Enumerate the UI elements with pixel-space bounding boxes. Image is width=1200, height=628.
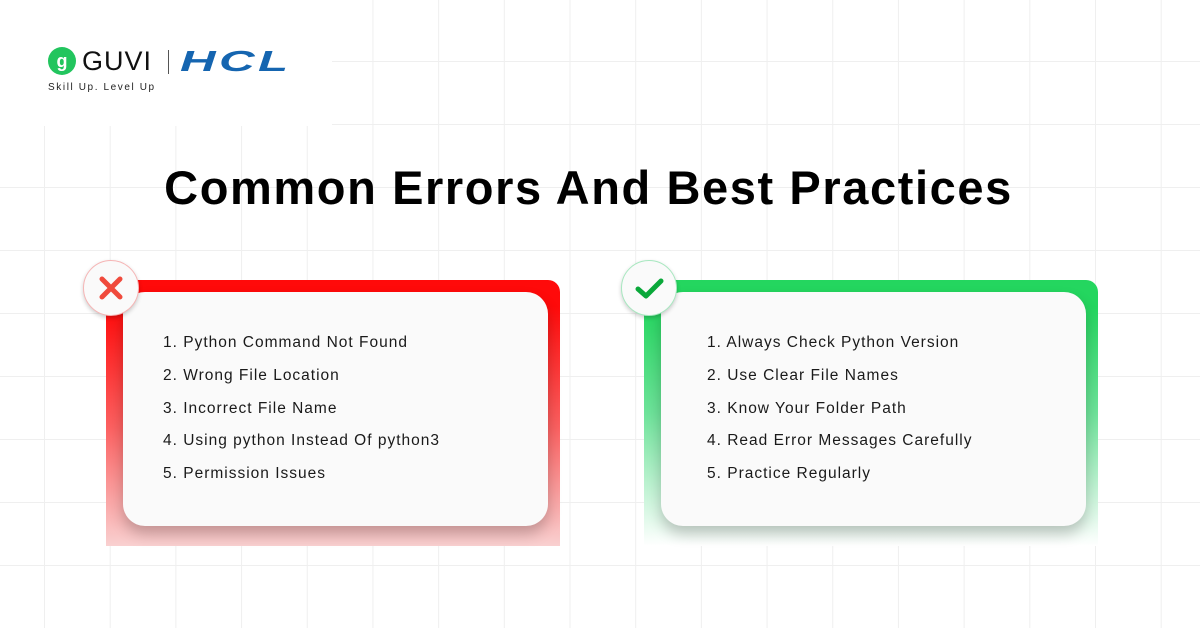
icon: guvi [48, 47, 76, 75]
errors list card: 2. Wrong File Location [163, 367, 340, 384]
practices list card [661, 292, 1086, 526]
practices list card: 1. Always Check Python Version [707, 334, 959, 351]
logo: HCL [180, 46, 292, 78]
panel: errors [81, 260, 560, 546]
errors list card: 1. Python Command Not Found [163, 334, 408, 351]
practices list card: 4. Read Error Messages Carefully [707, 432, 972, 449]
divider and hcl wordmark [168, 50, 308, 74]
icon: cross [83, 260, 139, 316]
logo [0, 0, 332, 126]
errors list card: 5. Permission Issues [163, 465, 326, 482]
icon: guvi: g [56, 51, 68, 71]
practices list card: 3. Know Your Folder Path [707, 400, 907, 417]
practices list card: 5. Practice Regularly [707, 465, 871, 482]
panel: best practices [619, 260, 1098, 546]
practices list card: 2. Use Clear File Names [707, 367, 899, 384]
errors list card: 4. Using python Instead Of python3 [163, 432, 440, 449]
tagline: Skill Up. Level Up [48, 82, 156, 93]
errors list card: 3. Incorrect File Name [163, 400, 337, 417]
guvi wordmark: GUVI [82, 46, 152, 76]
title: Common Errors And Best Practices [164, 161, 1013, 214]
errors list card [123, 292, 548, 526]
icon: check [621, 260, 677, 316]
